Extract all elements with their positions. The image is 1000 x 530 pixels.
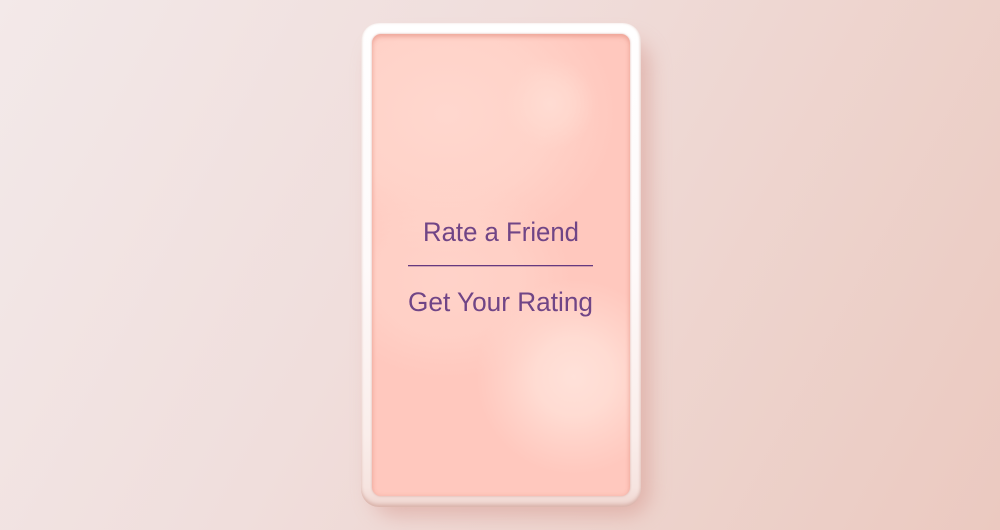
panel: phone screen [372, 34, 630, 496]
screen inner bevel [372, 34, 630, 496]
panel: phone frame [361, 23, 641, 507]
screen soft glows [373, 37, 630, 450]
text: Get Your Rating: Get Your Rating [408, 287, 593, 317]
card shadow [372, 40, 650, 516]
text block: headline [408, 217, 593, 317]
divider line [408, 265, 593, 266]
text: Rate a Friend: Rate a Friend [423, 217, 579, 247]
